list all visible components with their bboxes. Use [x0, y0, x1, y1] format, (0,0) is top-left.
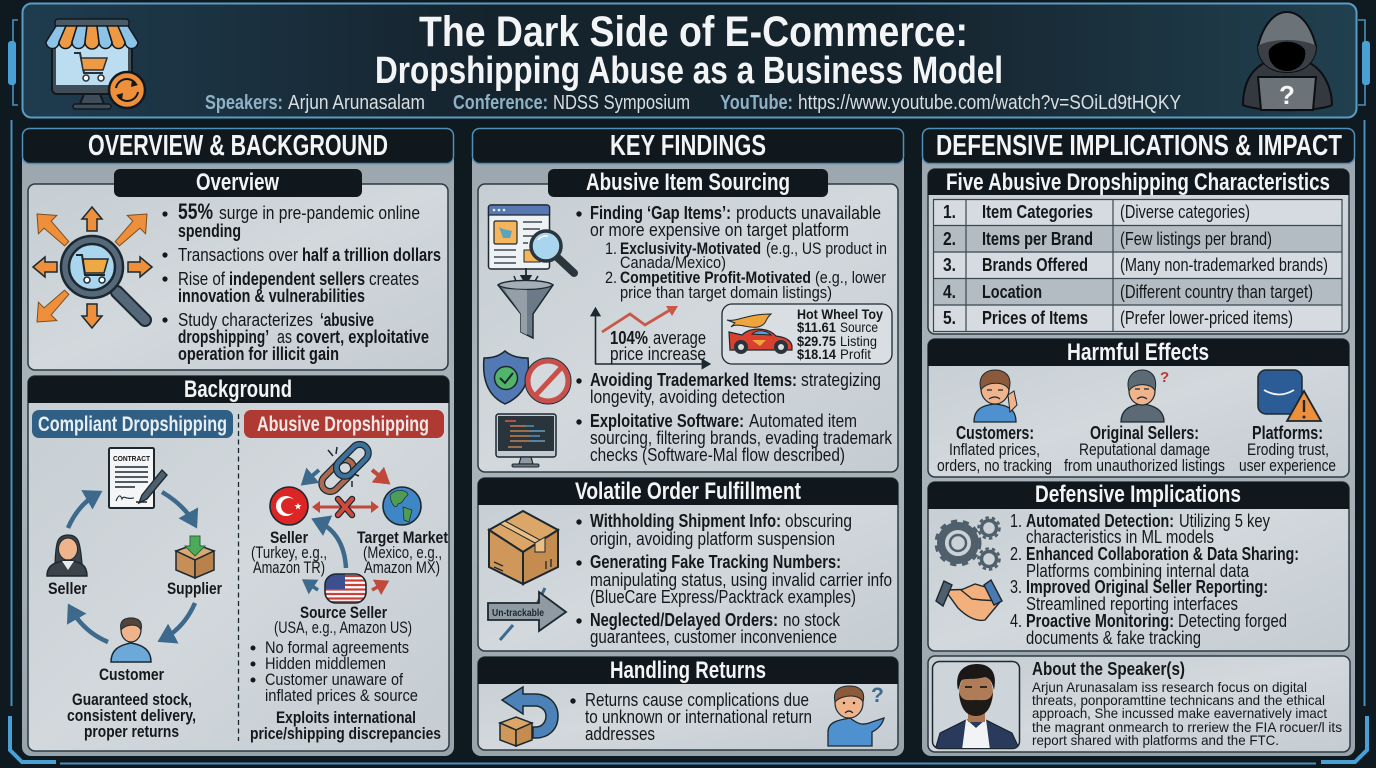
panel: volatile order fulfillment: [478, 478, 898, 651]
text: abusive bullets: No formal agreements: [265, 638, 409, 657]
label: seller turkey: (Turkey, e.g.,: [251, 543, 327, 562]
text: finding gap items: Exclusivity-Motivated: [620, 239, 761, 258]
heading: key findings: KEY FINDINGS: [610, 130, 766, 162]
table: characteristics: (Different country than target): [1120, 281, 1313, 302]
heading: defensive implications: Defensive Implications: [1035, 481, 1241, 508]
heading: overview and background: OVERVIEW & BACKGROUND: [88, 130, 388, 162]
text: fulfillment bullets: manipulating status, using invalid carrier info: [590, 569, 892, 590]
text: finding gap items: products unavailable: [736, 202, 881, 223]
text: avoiding trademarked items: strategizing: [801, 369, 881, 390]
text: overview bullets: creates: [369, 268, 419, 289]
text: exploitative software: Automated item: [749, 410, 857, 431]
text: exploitative software: [576, 410, 893, 465]
text: defensive list: Automated Detection:: [1026, 510, 1174, 531]
heading: abusive item sourcing: Abusive Item Sourcing: [586, 169, 790, 196]
icon: usa flag: [325, 574, 366, 603]
text: overview bullets: half a trillion dollars: [302, 244, 441, 265]
panel: column 1 overview and background: [22, 128, 454, 756]
text: compliant summary: consistent delivery,: [67, 706, 196, 725]
label: customer: Customer: [99, 665, 164, 684]
text: abusive bullets: [250, 638, 418, 705]
label: seller turkey: Amazon TR): [253, 558, 325, 577]
heading: background: Background: [184, 376, 292, 403]
table: characteristics: (Few listings per brand): [1120, 228, 1272, 249]
text: compliant summary: [67, 690, 196, 741]
icon: browser with magnifier: [488, 205, 574, 273]
chart: 104% average price increase: 104%: [610, 328, 648, 348]
heading: harmful effects: Harmful Effects: [1067, 339, 1209, 366]
text: fulfillment bullets: Withholding Shipment Info:: [590, 510, 781, 531]
text: avoiding trademarked items: Avoiding Trademarked Items:: [590, 369, 797, 390]
heading: compliant dropshipping: Compliant Dropshipping: [38, 413, 227, 436]
diagram: compliant cycle with contract: [47, 448, 222, 684]
speakers and links line: YouTube:: [720, 92, 793, 114]
text: price breakdown: [797, 306, 883, 362]
header banner: [22, 4, 1356, 118]
table: characteristics: Items per Brand: [982, 228, 1093, 249]
text: defensive list: Detecting forged: [1178, 610, 1287, 631]
text: defensive list: 1.: [1010, 510, 1022, 531]
icon: funnel: [498, 268, 553, 338]
text: price breakdown: $29.75: [797, 333, 836, 349]
text: defensive list: 2.: [1010, 543, 1022, 564]
text: defensive list: Platforms combining internal data: [1026, 560, 1250, 581]
text: fulfillment bullets: [576, 510, 892, 647]
text: customers effect: Inflated prices,: [949, 440, 1040, 459]
icon: worried original seller: ?: [1160, 369, 1169, 386]
panel: column 3 defensive implications and impact: [922, 128, 1355, 756]
text: speaker biography: [1032, 679, 1342, 748]
text: avoiding trademarked items: longevity, avoiding detection: [590, 386, 785, 407]
text: abusive bullets: Customer unaware of: [265, 670, 403, 689]
text: exploitative software: checks (Software-Mal flow described): [590, 444, 845, 465]
text: returns bullet: addresses: [585, 723, 655, 744]
icon: return arrow with box: [500, 687, 558, 746]
text: overview bullets: [162, 199, 441, 364]
text: finding gap items: 2.: [605, 268, 617, 287]
heading: overview: Overview: [196, 169, 279, 196]
table: characteristics: Prices of Items: [982, 307, 1088, 328]
card: hot wheel toy example: [722, 304, 892, 364]
text: returns bullet: [570, 689, 812, 744]
text: overview bullets: covert, exploitative: [296, 326, 429, 347]
icon: magnifier over cart with spreading arrows: [28, 205, 156, 331]
icon: contract and pen: [109, 448, 167, 508]
panel: abusive item sourcing: [478, 169, 898, 472]
label: supplier: Supplier: [167, 579, 222, 598]
icon: confused customer: ?: [871, 684, 884, 707]
icon: contract and pen: CONTRACT: [113, 454, 150, 463]
text: fulfillment bullets: obscuring: [785, 510, 852, 531]
icon: handshake: [936, 580, 1002, 620]
text: platforms effect: [1239, 423, 1336, 475]
icon: customer person: [111, 618, 151, 662]
text: finding gap items: [576, 202, 887, 302]
text: returns bullet: Returns cause complications due: [585, 689, 809, 710]
icon: platform with warning: [1258, 370, 1321, 421]
text: fulfillment bullets: Generating Fake Tracking Numbers:: [590, 551, 841, 572]
text: abusive summary: [250, 708, 441, 743]
text: defensive list: Enhanced Collaboration & Data Sharing:: [1026, 543, 1299, 564]
speakers and links line: Speakers:: [205, 92, 283, 114]
icon: code monitor: [496, 414, 556, 467]
heading: volatile order fulfillment: Volatile Order Fulfillment: [575, 478, 801, 505]
table: characteristics: 5.: [943, 307, 956, 328]
text: price breakdown: Profit: [840, 346, 871, 362]
text: price breakdown: $11.61: [797, 319, 836, 335]
label: source seller: Source Seller: [300, 603, 387, 622]
speakers and links line: Conference:: [453, 92, 548, 114]
text: speaker biography: threats, ponporamttine technicans and the ethical: [1032, 692, 1325, 708]
panel: harmful effects: [928, 339, 1349, 477]
text: speaker biography: approach, She incussed make eavernatively imact: [1032, 705, 1327, 721]
icon: confused customer: [828, 684, 884, 746]
icon: speaker portrait: [932, 662, 1020, 750]
text: defensive list: Improved Original Seller Reporting:: [1026, 576, 1268, 597]
text: defensive list: characteristics in ML models: [1026, 526, 1214, 547]
label: target market mexico: (Mexico, e.g.,: [363, 543, 442, 562]
text: returns bullet: to unknown or international return: [585, 706, 812, 727]
panel: defensive implications: [928, 481, 1349, 651]
text: overview bullets: operation for illicit gain: [178, 343, 339, 364]
text: compliant summary: Guaranteed stock,: [72, 690, 192, 709]
icon: distressed customer: [974, 370, 1017, 422]
icon: cardboard box: [489, 511, 558, 584]
table: characteristics: [933, 199, 1342, 332]
text: finding gap items: 1.: [605, 239, 617, 258]
text: overview bullets: Study characterizes: [178, 309, 313, 330]
text: abusive summary: Exploits international: [276, 708, 416, 727]
panel: column 2 key findings: [472, 128, 904, 756]
icon: toy race car: [727, 314, 792, 354]
text: price breakdown: $18.14: [797, 346, 836, 362]
text: overview bullets: Rise of: [178, 268, 226, 289]
text: original sellers effect: Reputational damage: [1079, 440, 1210, 459]
text: overview bullets: independent sellers: [229, 268, 365, 289]
label: seller: Seller: [48, 579, 87, 598]
label: source seller: [274, 603, 412, 637]
icon: gears: [937, 518, 1000, 570]
text: finding gap items: (e.g., lower: [815, 268, 886, 287]
text: customers effect: Customers:: [956, 423, 1034, 443]
icon: supplier box: [176, 536, 214, 578]
heading: about the speaker: About the Speaker(s): [1032, 658, 1185, 679]
table: characteristics: Brands Offered: [982, 254, 1088, 275]
panel: overview: [28, 169, 448, 370]
text: speaker biography: report shared with platforms and the FTC.: [1032, 732, 1279, 748]
text: fulfillment bullets: no stock: [783, 609, 841, 630]
chart: 104% average price increase: price increase: [610, 344, 706, 364]
icon: globe target market: [383, 487, 421, 525]
text: exploitative software: Exploitative Software:: [590, 410, 744, 431]
text: price breakdown: Hot Wheel Toy: [797, 306, 883, 322]
text: platforms effect: user experience: [1239, 456, 1336, 475]
diagram arrows: [305, 470, 386, 590]
icon: broken chain: [318, 441, 372, 495]
text: price breakdown: Source: [840, 319, 878, 335]
heading: key findings: [472, 128, 904, 164]
text: overview bullets: dropshipping’: [178, 326, 269, 347]
text: original sellers effect: Original Sellers:: [1090, 423, 1199, 443]
text: overview bullets: spending: [178, 220, 241, 241]
text: fulfillment bullets: origin, avoiding platform suspension: [590, 528, 835, 549]
text: compliant summary: proper returns: [84, 722, 179, 741]
text: original sellers effect: from unauthorized listings: [1064, 456, 1225, 475]
icon: seller person: [47, 535, 87, 576]
chart: 104% average price increase: [595, 306, 708, 364]
label: target market mexico: Amazon MX): [364, 558, 440, 577]
text: finding gap items: Competitive Profit-Motivated: [620, 268, 811, 287]
text: fulfillment bullets: Neglected/Delayed Orders:: [590, 609, 778, 630]
icon: untrackable arrow: Un-trackable: [492, 608, 544, 619]
title: [375, 8, 1003, 92]
text: overview bullets: ‘abusive: [320, 309, 374, 330]
text: abusive bullets: Hidden middlemen: [265, 654, 386, 673]
text: overview bullets: 55%: [178, 199, 213, 224]
text: price breakdown: Listing: [840, 333, 877, 349]
label: seller turkey: Seller: [270, 528, 308, 547]
text: finding gap items: or more expensive on target platform: [590, 219, 849, 240]
text: defensive list: 4.: [1010, 610, 1022, 631]
icon: hooded hacker: [1243, 12, 1332, 110]
icon: shield and prohibited sign: [484, 351, 571, 404]
speakers and links line: Arjun Arunasalam: [288, 92, 425, 114]
table: characteristics: Item Categories: [982, 201, 1093, 222]
text: platforms effect: Platforms:: [1252, 423, 1323, 443]
text: defensive list: Streamlined reporting interfaces: [1026, 593, 1238, 614]
panel: about the speaker: [928, 656, 1350, 752]
text: overview bullets: as: [277, 326, 292, 347]
table: characteristics: 3.: [943, 254, 956, 275]
text: speaker biography: Arjun Arunasalam iss research focus on digital: [1032, 679, 1307, 695]
text: fulfillment bullets: guarantees, customer inconvenience: [590, 626, 837, 647]
table: characteristics: 4.: [943, 281, 956, 302]
chart: 104% average price increase: average: [653, 328, 706, 348]
speakers and links line: [205, 92, 1181, 114]
icon: hooded hacker: ?: [1279, 80, 1295, 110]
text: finding gap items: Finding ‘Gap Items’:: [590, 202, 731, 223]
text: defensive list: Utilizing 5 key: [1179, 510, 1271, 531]
label: source seller: (USA, e.g., Amazon US): [274, 618, 412, 637]
label: target market mexico: [357, 528, 448, 577]
title: The Dark Side of E-Commerce:: [419, 8, 968, 56]
label: target market mexico: Target Market: [357, 528, 448, 547]
heading: abusive dropshipping: Abusive Dropshipping: [257, 413, 429, 436]
table: characteristics: (Prefer lower-priced items): [1120, 307, 1293, 328]
text: overview bullets: innovation & vulnerabilities: [178, 285, 365, 306]
text: overview bullets: surge in pre-pandemic online: [219, 202, 420, 223]
icon: worried original seller: [1121, 369, 1169, 422]
text: finding gap items: (e.g., US product in: [766, 239, 887, 258]
icon: untrackable arrow: [488, 588, 566, 640]
heading: compliant dropshipping: [32, 410, 233, 438]
text: avoiding trademarked items: [576, 369, 881, 407]
text: overview bullets: Transactions over: [178, 244, 298, 265]
title: Dropshipping Abuse as a Business Model: [375, 50, 1003, 92]
text: exploitative software: sourcing, filtering brands, evading trademark: [590, 427, 893, 448]
table: characteristics: Location: [982, 281, 1042, 302]
text: defensive list: Proactive Monitoring:: [1026, 610, 1174, 631]
panel: five abusive dropshipping characteristics: [928, 169, 1349, 334]
sub-panel: abusive dropshipping: [244, 410, 448, 743]
speakers and links line: NDSS Symposium: [553, 92, 690, 114]
table: characteristics: 2.: [943, 228, 956, 249]
panel: background: [28, 376, 449, 751]
text: speaker biography: the magrant onmearch to rreriew the FIA rocuer/l its: [1032, 719, 1342, 735]
table: characteristics: (Diverse categories): [1120, 201, 1250, 222]
text: original sellers effect: [1064, 423, 1225, 475]
label: seller turkey: [251, 528, 327, 577]
icon: turkey flag: [270, 487, 308, 525]
text: abusive summary: price/shipping discrepancies: [250, 724, 441, 743]
text: customers effect: orders, no tracking: [937, 456, 1052, 475]
text: customers effect: [937, 423, 1052, 475]
text: fulfillment bullets: (BlueCare Express/Packtrack examples): [590, 586, 856, 607]
speakers and links line: https://www.youtube.com/watch?v=SOiLd9tHQKY: [798, 92, 1181, 114]
text: finding gap items: price than target domain listings): [620, 283, 832, 302]
heading: abusive dropshipping: [244, 410, 444, 438]
panel: handling returns: [478, 657, 898, 750]
text: defensive list: 3.: [1010, 576, 1022, 597]
table: characteristics: 1.: [943, 201, 956, 222]
heading: handling returns: Handling Returns: [610, 657, 766, 684]
icon: online storefront: [46, 19, 145, 109]
text: finding gap items: Canada/Mexico): [620, 253, 726, 272]
text: abusive bullets: inflated prices & source: [265, 686, 418, 705]
sub-panel: compliant dropshipping: [32, 410, 233, 741]
text: platforms effect: Eroding trust,: [1247, 440, 1329, 459]
text: defensive list: [1010, 510, 1299, 648]
text: defensive list: documents & fake tracking: [1026, 627, 1201, 648]
